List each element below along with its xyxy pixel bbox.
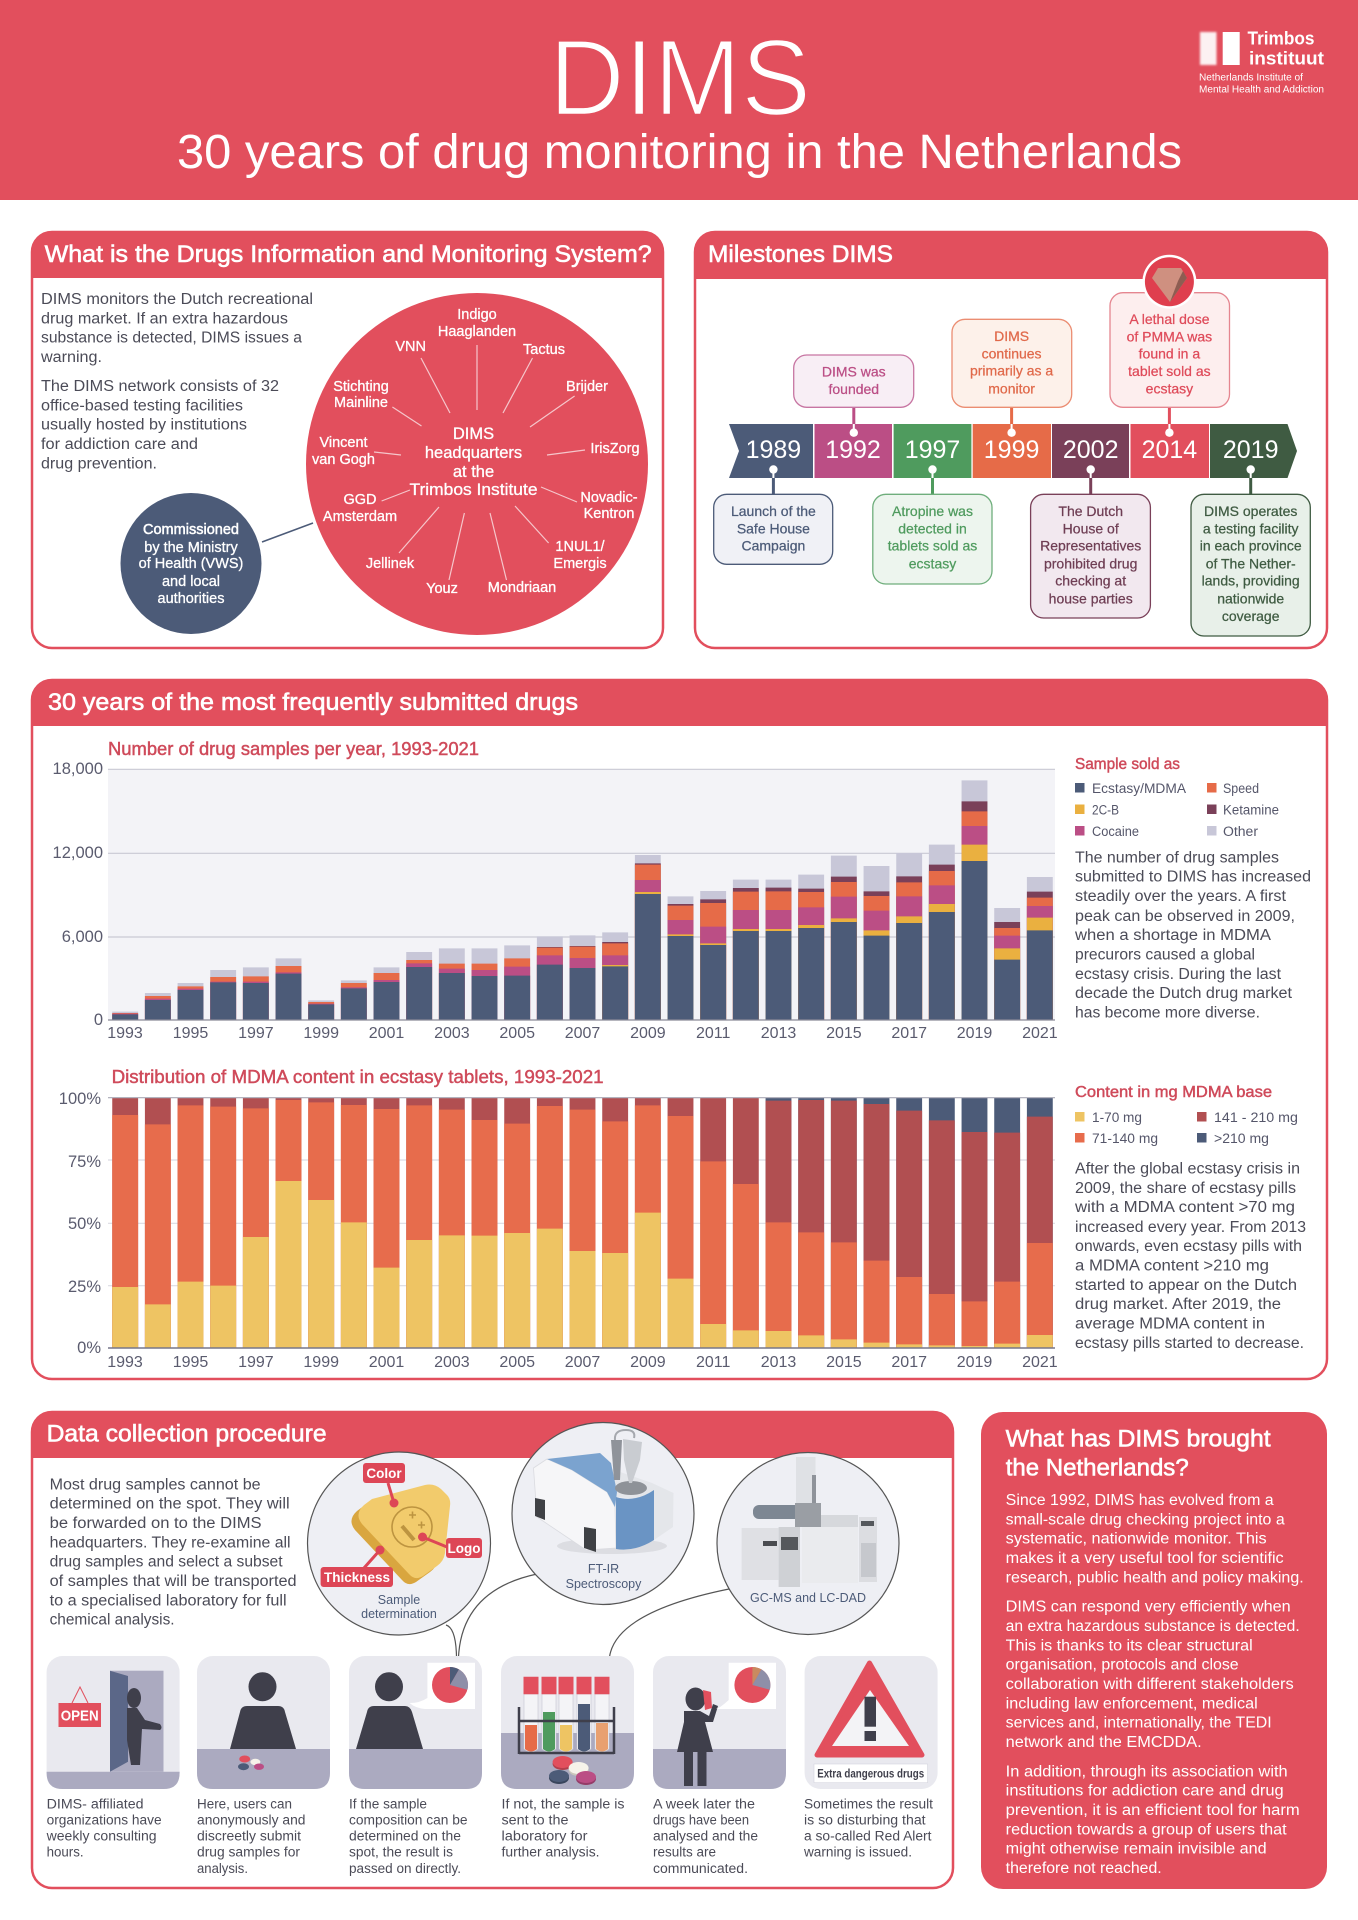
text: MDMA commentary: drug market. After 2019, the	[1075, 1296, 1281, 1313]
y axis labels: 12,000	[53, 844, 103, 862]
network circle: headquarters	[425, 444, 522, 462]
text: samples commentary: submitted to DIMS has increased	[1075, 869, 1311, 886]
intro text: substance is detected, DIMS issues a	[41, 330, 302, 347]
callout: Thickness	[321, 1546, 393, 1587]
step 6: red alert	[803, 1656, 938, 1860]
text: MDMA commentary	[1074, 1160, 1306, 1352]
milestone 1997: ecstasy	[909, 555, 956, 571]
text: procedure intro: determined on the spot. They will	[50, 1496, 290, 1513]
legend: content in mg MDMA base: >210 mg	[1214, 1131, 1269, 1146]
x axis labels: 2003	[434, 1354, 470, 1371]
stacked 100% bar chart: MDMA content	[59, 1090, 1058, 1371]
milestone 1999: primarily as a	[970, 363, 1053, 379]
legend: content in mg MDMA base: Content in mg MDMA base	[1075, 1084, 1272, 1101]
step 6: red alert: a so-called Red Alert	[804, 1829, 932, 1844]
circle: sample determination: Sample	[378, 1593, 420, 1607]
x axis labels: 1993	[107, 1025, 143, 1042]
step 2: submit samples: anonymously and	[197, 1812, 306, 1827]
text: paragraph 2: including law enforcement, medical	[1006, 1695, 1258, 1712]
step 1: consulting hours: DIMS- affiliated	[47, 1796, 144, 1811]
step 4: sent to laboratory: laboratory for	[502, 1829, 588, 1844]
heading: What has DIMS brought	[1006, 1426, 1271, 1453]
callout: Color: Color	[366, 1466, 402, 1481]
legend: sample sold as: Cocaine	[1092, 824, 1139, 839]
milestone 2002: checking at	[1055, 573, 1126, 589]
text: samples commentary: ecstasy crisis. During the last	[1075, 966, 1282, 983]
text: MDMA commentary: average MDMA content in	[1075, 1316, 1265, 1333]
circle: FT-IR spectroscopy: Spectroscopy	[566, 1577, 642, 1591]
milestone 1992	[794, 355, 914, 437]
panel: data collection procedure	[32, 1412, 953, 1888]
network circle: 1NUL1/	[555, 539, 606, 555]
intro text: drug market. If an extra hazardous	[41, 310, 288, 327]
network circle: Trimbos Institute	[410, 481, 538, 499]
x axis labels: 2005	[499, 1025, 535, 1042]
text: samples commentary: decade the Dutch drug market	[1075, 985, 1293, 1002]
network circle: GGD	[343, 492, 377, 508]
x axis labels: 2021	[1022, 1354, 1058, 1371]
timeline ribbon: 1997	[905, 436, 960, 464]
milestone 2002: House of	[1063, 520, 1119, 536]
x axis labels: 2015	[826, 1354, 862, 1371]
text: paragraph 1: makes it a very useful tool for scientific	[1006, 1550, 1284, 1567]
x axis labels	[107, 1025, 1058, 1042]
navy circle: commissioned by: by the Ministry	[144, 540, 238, 556]
callout: Logo	[418, 1532, 482, 1558]
text: samples commentary: steadily over the years. A first	[1075, 888, 1287, 905]
x axis labels: 2019	[957, 1354, 992, 1371]
step 2: submit samples	[197, 1656, 330, 1876]
y axis labels: 6,000	[62, 928, 103, 946]
network circle	[306, 293, 648, 635]
navy circle: commissioned by: authorities	[158, 591, 224, 607]
step 1: consulting hours	[46, 1656, 180, 1860]
text: paragraph 3: might otherwise remain invisible and	[1006, 1841, 1267, 1858]
milestone 2019: DIMS operates	[1204, 503, 1297, 519]
heading	[1006, 1426, 1271, 1482]
text: paragraph 3: prevention, it is an efficient tool for harm	[1006, 1802, 1300, 1819]
x axis labels: 2011	[696, 1025, 731, 1042]
network circle: Stichting	[333, 379, 389, 395]
milestone 2014: tablet sold as	[1128, 363, 1211, 379]
heading: Data collection procedure	[47, 1421, 327, 1448]
milestone 2019: nationwide	[1217, 590, 1284, 606]
icon: pills	[549, 1756, 596, 1785]
milestone 2019: of The Nether-	[1206, 555, 1296, 571]
heading: 30 years of the most frequently submitted drugs	[48, 689, 578, 716]
milestone 2019: lands, providing	[1202, 573, 1300, 589]
text: MDMA commentary: onwards, even ecstasy pills with	[1075, 1238, 1302, 1255]
text: paragraph 3: In addition, through its association with	[1006, 1763, 1288, 1780]
header banner	[0, 0, 1358, 200]
logo: Trimbos instituut: instituut	[1249, 48, 1324, 68]
navy circle: commissioned by: of Health (VWS)	[139, 556, 243, 572]
label: extra dangerous drugs	[814, 1764, 928, 1783]
milestone 2019: a testing facility	[1203, 520, 1299, 536]
connector lines	[446, 1574, 729, 1657]
text: paragraph 3	[1006, 1763, 1300, 1877]
panel: 30 years of most frequently submitted drugs	[32, 680, 1327, 1379]
x axis labels: 2007	[565, 1025, 600, 1042]
intro text: for addiction care and	[41, 436, 198, 453]
circle: GC-MS and LC-DAD	[717, 1452, 899, 1634]
logo: Trimbos instituut: Trimbos	[1248, 28, 1314, 48]
text: procedure intro: of samples that will be transported	[50, 1573, 297, 1590]
legend: sample sold as: 2C-B	[1092, 802, 1119, 818]
text: MDMA commentary: with a MDMA content >70 mg	[1074, 1199, 1295, 1216]
navy circle: commissioned by: and local	[162, 574, 220, 590]
chart title: MDMA distribution: Distribution of MDMA content in ecstasy tablets, 1993-2021	[112, 1067, 604, 1087]
x axis labels: 1995	[173, 1354, 208, 1371]
text: MDMA commentary: started to appear on the Dutch	[1075, 1277, 1297, 1294]
x axis labels: 1995	[173, 1025, 208, 1042]
network circle: Vincent	[319, 435, 368, 451]
legend: content in mg MDMA base	[1075, 1084, 1298, 1146]
step 5: results communicated: analysed and the	[653, 1829, 758, 1844]
panel: what is DIMS	[32, 232, 663, 648]
x axis labels: 1997	[238, 1025, 274, 1042]
legend: content in mg MDMA base: 1-70 mg	[1092, 1110, 1142, 1125]
intro text: drug prevention.	[41, 455, 157, 472]
milestone 1999: monitor	[988, 380, 1035, 396]
text: procedure intro: headquarters. They re-examine all	[50, 1534, 291, 1551]
icon: OPEN sign: OPEN	[61, 1708, 99, 1724]
y axis labels: 75%	[68, 1153, 101, 1171]
network circle: Jellinek	[366, 556, 415, 572]
text: samples commentary	[1074, 849, 1311, 1022]
timeline ribbon: 2014	[1142, 436, 1197, 464]
icon: warning triangle	[817, 1663, 922, 1755]
network circle: Indigo	[457, 307, 497, 323]
logo: Trimbos instituut: Netherlands Institute of	[1199, 72, 1303, 84]
text: paragraph 1	[1006, 1492, 1304, 1586]
text: paragraph 2	[1006, 1599, 1300, 1751]
network circle: IrisZorg	[590, 441, 640, 457]
milestone 1997: Atropine was	[892, 503, 973, 519]
step 5: results communicated: results are	[653, 1845, 716, 1860]
x axis labels: 2013	[761, 1354, 796, 1371]
text: MDMA commentary: After the global ecstasy crisis in	[1075, 1160, 1300, 1178]
callout: Thickness: Thickness	[324, 1570, 390, 1585]
step 2: submit samples: drug samples for	[197, 1845, 301, 1860]
milestone 2019: coverage	[1222, 608, 1280, 624]
milestone 2002: The Dutch	[1058, 503, 1123, 519]
network circle: Brijder	[566, 379, 608, 395]
step 3: result on the spot: determined on the	[349, 1829, 461, 1844]
legend: content in mg MDMA base: 141 - 210 mg	[1214, 1110, 1298, 1125]
network circle: Tactus	[523, 342, 565, 358]
text: paragraph 2: services and, internationally, the TEDI	[1006, 1715, 1272, 1732]
text: procedure intro: drug samples and select a subset	[50, 1554, 283, 1571]
step 3: result on the spot: spot, the result is	[349, 1845, 453, 1860]
step 6: red alert: warning is issued.	[803, 1845, 912, 1860]
circle: GC-MS and LC-DAD: GC-MS and LC-DAD	[750, 1591, 866, 1605]
intro text: The DIMS network consists of 32	[41, 378, 279, 395]
milestone 1999: continues	[982, 345, 1042, 361]
y axis labels	[53, 760, 103, 1029]
milestone 2002	[1031, 465, 1150, 618]
milestone 1989: Campaign	[741, 538, 805, 554]
milestone 2019	[1191, 465, 1310, 636]
timeline ribbon: 2019	[1223, 436, 1279, 464]
milestone 1999: DIMS	[994, 328, 1029, 344]
text: paragraph 1: systematic, nationwide monitor. This	[1006, 1531, 1267, 1548]
milestone 1997: detected in	[898, 520, 967, 536]
text: paragraph 3: institutions for addiction care and drug	[1006, 1783, 1284, 1800]
legend: content in mg MDMA base: 71-140 mg	[1092, 1131, 1158, 1146]
text: paragraph 3: therefore not reached.	[1006, 1860, 1162, 1877]
text: paragraph 1: small-scale drug checking project into a	[1006, 1511, 1285, 1528]
milestone 1989: Safe House	[737, 520, 810, 536]
text: procedure intro: chemical analysis.	[50, 1612, 175, 1629]
network circle: Youz	[426, 581, 458, 597]
circle: sample determination: determination	[361, 1607, 437, 1621]
text: paragraph 2: network and the EMCDDA.	[1006, 1734, 1202, 1751]
x axis labels: 1999	[303, 1025, 339, 1042]
intro text	[40, 291, 313, 472]
x axis labels: 2001	[369, 1354, 404, 1371]
network circle: Kentron	[584, 506, 634, 522]
x axis labels	[107, 1354, 1058, 1371]
milestone 2014: found in a	[1139, 346, 1200, 362]
step 5: results communicated: A week later the	[653, 1796, 755, 1811]
milestone 2014: of PMMA was	[1127, 328, 1212, 344]
x axis labels: 2017	[891, 1025, 927, 1042]
x axis labels: 2001	[369, 1025, 404, 1042]
step 4: sent to laboratory	[501, 1656, 634, 1860]
x axis labels: 2005	[499, 1354, 535, 1371]
legend: sample sold as: Ecstasy/MDMA	[1092, 781, 1186, 796]
y axis labels: 25%	[68, 1278, 101, 1296]
text: MDMA commentary: a MDMA content >210 mg	[1075, 1258, 1269, 1275]
step 5: results communicated: drugs have been	[653, 1812, 749, 1827]
navy circle: commissioned by	[120, 493, 262, 634]
legend: sample sold as: Speed	[1223, 781, 1259, 796]
intro text: DIMS monitors the Dutch recreational	[41, 291, 313, 308]
y axis labels	[59, 1090, 101, 1357]
milestone 2014: ecstasy	[1146, 381, 1193, 397]
timeline ribbon: 2002	[1063, 436, 1119, 464]
heading: What is the Drugs Information and Monitoring System?	[45, 241, 652, 268]
timeline ribbon: 1992	[825, 436, 881, 464]
text: paragraph 1: research, public health and policy making.	[1006, 1569, 1304, 1586]
text: paragraph 3: reduction towards a group of users that	[1006, 1821, 1287, 1838]
network circle: Emergis	[553, 556, 607, 572]
milestone 1989: Launch of the	[731, 503, 816, 519]
milestone 1997: tablets sold as	[888, 538, 977, 554]
logo: Trimbos instituut: Mental Health and Addiction	[1199, 84, 1324, 96]
x axis labels: 2019	[957, 1025, 992, 1042]
intro text: usually hosted by institutions	[41, 417, 247, 434]
text: paragraph 1: Since 1992, DIMS has evolved from a	[1006, 1492, 1274, 1509]
milestone 1999	[952, 319, 1072, 437]
step 3: result on the spot	[349, 1656, 482, 1876]
text: samples commentary: precurors caused a global	[1075, 947, 1255, 964]
step 3: result on the spot: If the sample	[349, 1796, 427, 1811]
circle: FT-IR spectroscopy: FT-IR	[588, 1562, 619, 1576]
timeline ribbon: 1989	[746, 436, 801, 464]
chart title: samples per year: Number of drug samples per year, 1993-2021	[108, 739, 479, 759]
step 4: sent to laboratory: sent to the	[502, 1812, 568, 1827]
timeline ribbon	[729, 424, 1297, 478]
icon: OPEN sign	[58, 1687, 101, 1727]
subtitle: 30 years of drug monitoring in the Netherlands	[177, 126, 1182, 179]
icon: tablet	[351, 1484, 450, 1584]
heading: Milestones DIMS	[708, 241, 893, 268]
milestone 2002: Representatives	[1040, 538, 1141, 554]
circle: FT-IR spectroscopy	[512, 1422, 694, 1604]
step 1: consulting hours: hours.	[47, 1845, 84, 1860]
network circle: DIMS	[453, 425, 494, 443]
network circle: Novadic-	[580, 490, 638, 506]
y axis labels: 0	[94, 1011, 103, 1029]
text: paragraph 2: This is thanks to its clear structural	[1006, 1637, 1253, 1654]
y axis labels: 18,000	[53, 760, 103, 778]
icon: pie chart bubble	[410, 1663, 475, 1709]
stacked bar chart: samples per year	[53, 760, 1058, 1042]
x axis labels: 2013	[761, 1025, 796, 1042]
y axis labels: 50%	[68, 1215, 101, 1233]
x axis labels: 2011	[696, 1354, 731, 1371]
step 1: consulting hours: organizations have	[47, 1812, 162, 1827]
text: paragraph 2: DIMS can respond very efficiently when	[1006, 1599, 1291, 1616]
text: MDMA commentary: ecstasy pills started to decrease.	[1075, 1335, 1304, 1352]
text: procedure intro: to a specialised laboratory for full	[50, 1592, 287, 1609]
text: procedure intro: Most drug samples cannot be	[50, 1476, 261, 1493]
x axis labels: 2009	[630, 1025, 666, 1042]
logo: Trimbos instituut	[1199, 28, 1324, 96]
milestone 2014: A lethal dose	[1129, 311, 1210, 327]
step 3: result on the spot: passed on directly.	[349, 1861, 461, 1876]
text: samples commentary: when a shortage in MDMA	[1074, 927, 1272, 944]
panel: milestones	[695, 232, 1327, 648]
callout: Color	[363, 1463, 405, 1508]
step 5: results communicated: communicated.	[653, 1861, 748, 1876]
legend: sample sold as: Other	[1223, 824, 1259, 839]
intro text: office-based testing facilities	[41, 397, 243, 414]
y axis labels: 0%	[77, 1339, 101, 1357]
text: samples commentary: has become more diverse.	[1075, 1005, 1260, 1022]
step 4: sent to laboratory: If not, the sample is	[502, 1796, 625, 1811]
milestone 2014	[1110, 255, 1230, 437]
network circle: Mondriaan	[488, 580, 556, 596]
milestone 2002: house parties	[1049, 590, 1133, 606]
navy circle: commissioned by: Commissioned	[143, 522, 239, 538]
milestone 1992: founded	[828, 381, 879, 397]
x axis labels: 2015	[826, 1025, 862, 1042]
x axis labels: 1993	[107, 1354, 143, 1371]
text: MDMA commentary: 2009, the share of ecstasy pills	[1075, 1180, 1296, 1197]
callout: Logo: Logo	[448, 1541, 480, 1556]
network circle: van Gogh	[312, 452, 375, 468]
icon: PMMA diamond tablet	[1142, 255, 1196, 309]
step 6: red alert: Sometimes the result	[804, 1796, 933, 1811]
text: paragraph 2: an extra hazardous substance is detected.	[1006, 1618, 1300, 1635]
network circle: Mainline	[334, 395, 388, 411]
milestone 2019: in each province	[1200, 538, 1302, 554]
text: paragraph 2: collaboration with different stakeholders	[1006, 1676, 1294, 1693]
x axis labels: 2003	[434, 1025, 470, 1042]
network circle: Amsterdam	[323, 509, 397, 525]
network circle: at the	[453, 463, 494, 481]
step 3: result on the spot: composition can be	[349, 1812, 468, 1827]
text: procedure intro	[50, 1476, 297, 1629]
network circle: Haaglanden	[438, 324, 516, 340]
title: DIMS	[549, 17, 811, 139]
icon: spectrometer	[534, 1430, 674, 1554]
intro text: warning.	[40, 349, 102, 366]
text: procedure intro: be forwarded on to the DIMS	[50, 1515, 262, 1532]
step 5: results communicated	[653, 1656, 786, 1876]
heading: the Netherlands?	[1006, 1455, 1189, 1482]
step 2: submit samples: Here, users can	[197, 1796, 292, 1811]
x axis labels: 2021	[1022, 1025, 1058, 1042]
x axis labels: 2007	[565, 1354, 600, 1371]
network circle: VNN	[395, 339, 426, 355]
legend: sample sold as: Sample sold as	[1075, 756, 1180, 773]
icon: small pills	[238, 1756, 264, 1770]
text: paragraph 2: organisation, protocols and close	[1006, 1657, 1239, 1674]
step 6: red alert: is so disturbing that	[804, 1812, 926, 1827]
connector line	[262, 523, 313, 542]
x axis labels: 2017	[891, 1354, 927, 1371]
icon: pie chart bubble	[716, 1663, 776, 1709]
step 2: submit samples: discreetly submit	[197, 1829, 301, 1844]
text: MDMA commentary: increased every year. From 2013	[1075, 1219, 1306, 1236]
timeline ribbon: 1999	[984, 436, 1039, 464]
x axis labels: 2009	[630, 1354, 666, 1371]
step 1: consulting hours: weekly consulting	[46, 1829, 157, 1844]
label: extra dangerous drugs: Extra dangerous drugs	[817, 1766, 924, 1780]
milestone 1997	[873, 465, 992, 584]
circle: sample determination	[308, 1452, 490, 1635]
x axis labels: 1999	[303, 1354, 339, 1371]
legend: sample sold as	[1075, 756, 1279, 839]
icon: chromatograph	[742, 1457, 877, 1587]
milestone 1989	[714, 465, 833, 564]
legend: sample sold as: Ketamine	[1223, 802, 1279, 818]
step 4: sent to laboratory: further analysis.	[502, 1845, 600, 1860]
milestone 1992: DIMS was	[822, 364, 886, 380]
y axis labels: 100%	[59, 1090, 101, 1108]
text: samples commentary: The number of drug samples	[1075, 849, 1279, 866]
text: samples commentary: peak can be observed in 2009,	[1075, 908, 1295, 925]
icon: test tubes	[519, 1677, 614, 1754]
x axis labels: 1997	[238, 1354, 274, 1371]
panel: what has DIMS brought the Netherlands	[981, 1412, 1327, 1889]
step 2: submit samples: analysis.	[197, 1861, 248, 1876]
milestone 2002: prohibited drug	[1044, 555, 1137, 571]
